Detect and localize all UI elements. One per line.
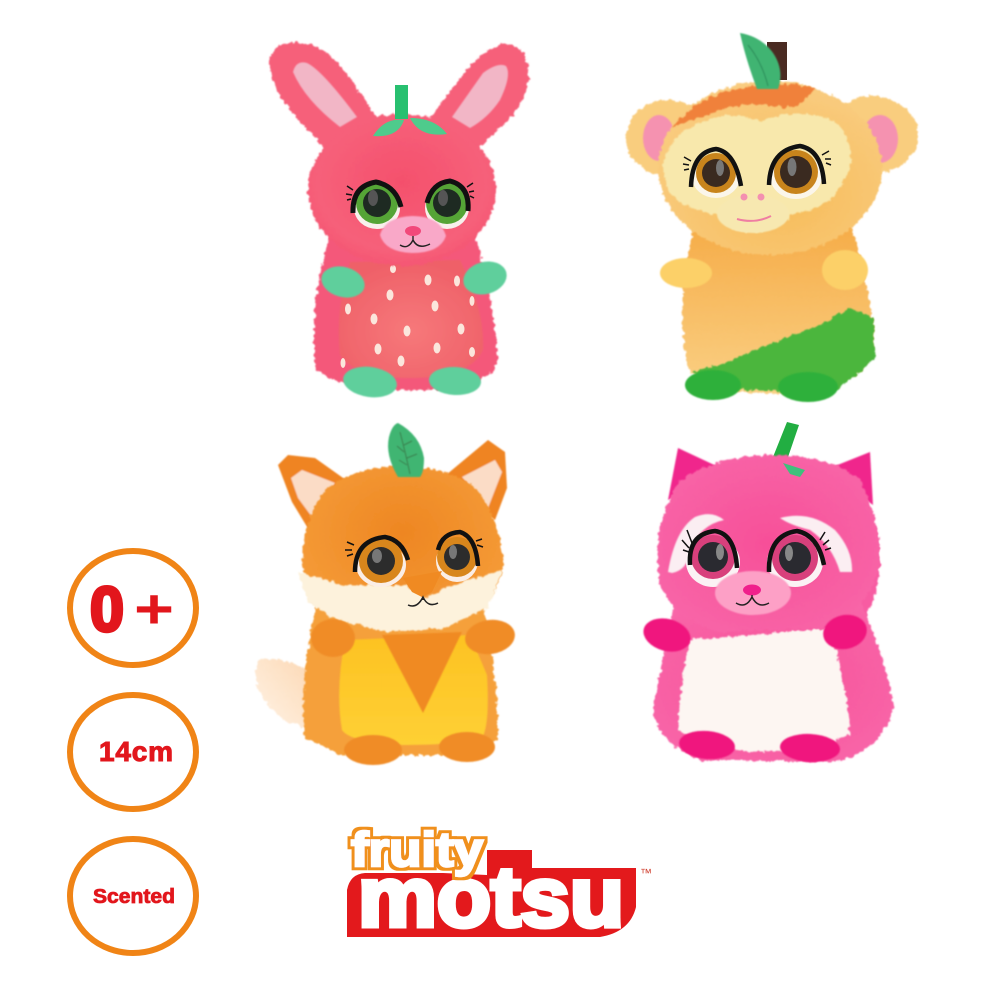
plush: strawberry bunny xyxy=(270,42,529,401)
bunny stem and leaves xyxy=(373,85,447,136)
badge: size 14cm xyxy=(70,695,196,809)
panda muzzle xyxy=(715,571,791,615)
monkey paws xyxy=(660,250,868,402)
panda paws xyxy=(640,611,870,764)
panda head xyxy=(658,455,880,632)
panda stem and leaf xyxy=(773,422,799,460)
bunny head xyxy=(308,114,496,266)
fox tail xyxy=(256,659,312,727)
logo: Fruity Motsu xyxy=(347,824,652,944)
bunny eyes xyxy=(346,181,474,229)
monkey muzzle xyxy=(717,194,789,233)
bunny ears xyxy=(270,42,529,170)
plush: apple monkey xyxy=(626,33,918,402)
panda eyes xyxy=(682,530,831,587)
fox paws xyxy=(311,617,517,765)
bunny paws xyxy=(318,257,510,401)
monkey orange crown xyxy=(672,84,815,128)
logo red block xyxy=(347,850,636,937)
plush: orange fox xyxy=(256,423,517,765)
badge: age 0+: 0 xyxy=(90,575,124,645)
panda leaf xyxy=(783,463,805,477)
fox eyes xyxy=(345,532,483,587)
monkey cream face xyxy=(663,114,851,232)
bunny muzzle xyxy=(380,216,446,253)
monkey green bottom xyxy=(692,308,875,392)
panda body fur xyxy=(653,600,893,762)
fox head xyxy=(303,467,503,632)
badge: age 0+: + xyxy=(134,577,174,640)
monkey inner ears xyxy=(643,115,898,163)
logo word fruity: fruity xyxy=(351,824,483,877)
monkey eyes xyxy=(683,146,831,199)
monkey head xyxy=(658,81,882,255)
bunny inner ears xyxy=(293,62,508,128)
fox leaf xyxy=(388,423,424,477)
panda white belly xyxy=(678,628,850,752)
fox body xyxy=(303,600,497,755)
panda ears xyxy=(668,448,873,505)
logo word motsu: motsu xyxy=(358,850,624,944)
badge: scented xyxy=(70,839,196,953)
badge: size 14cm: 14cm xyxy=(99,736,173,767)
fox white cheeks xyxy=(298,570,503,632)
bunny belly xyxy=(339,260,483,378)
monkey stem xyxy=(767,42,787,80)
bunny body xyxy=(314,235,497,390)
fox yellow panel xyxy=(339,635,488,745)
plush: raspberry panda xyxy=(640,422,893,764)
monkey leaf xyxy=(740,33,780,89)
logo trademark: ™ xyxy=(640,866,652,880)
bunny seeds xyxy=(340,265,475,368)
fox ears xyxy=(278,440,507,535)
fox carrot triangle xyxy=(382,632,462,713)
fox nose and mouth xyxy=(403,571,442,606)
monkey body xyxy=(682,225,874,394)
badge: age 0+ xyxy=(70,551,196,665)
panda back fur xyxy=(850,500,880,625)
badge: scented: Scented xyxy=(93,886,175,908)
monkey ears xyxy=(626,96,918,176)
panda white brows xyxy=(668,514,852,573)
